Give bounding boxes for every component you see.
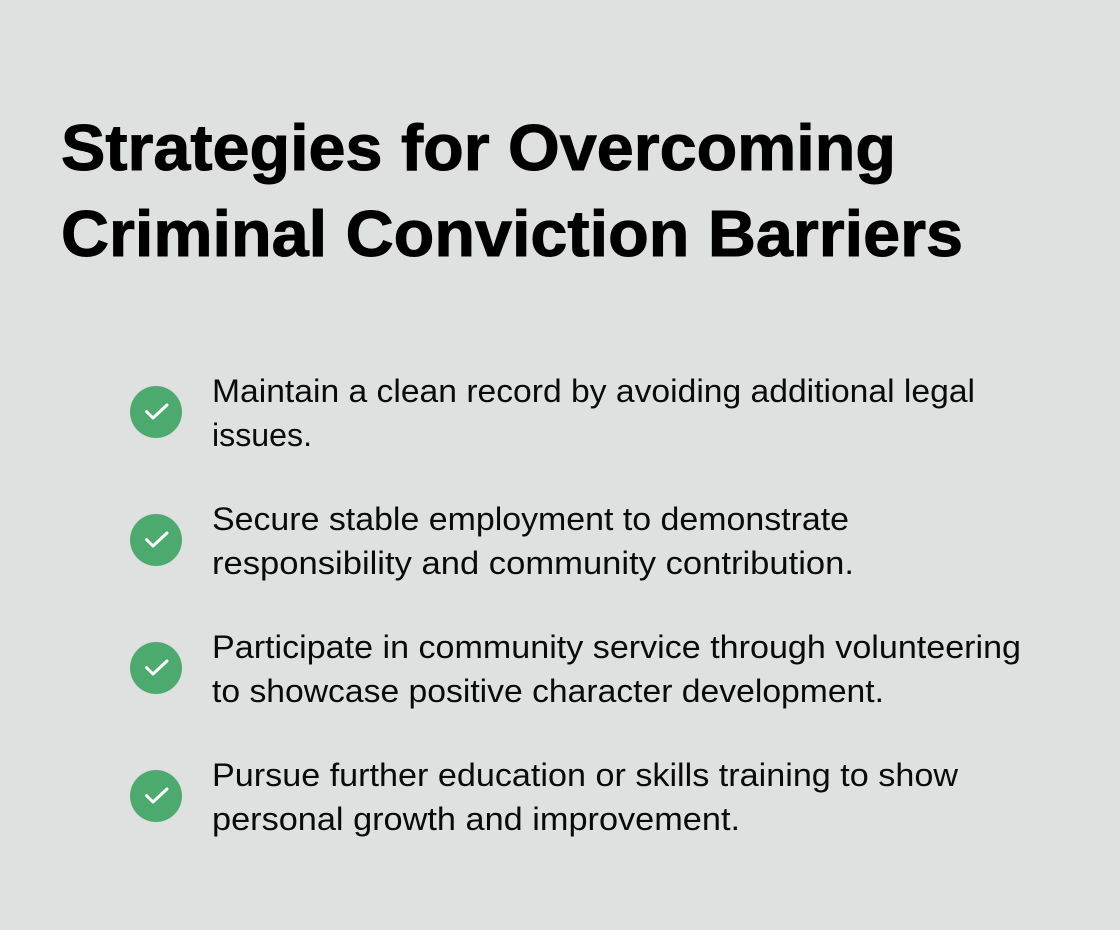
icon: check circle 3 <box>130 642 182 694</box>
text: item 4 <box>212 757 959 837</box>
text: item 1 <box>212 373 975 453</box>
text: item 2: Secure stable employment to demonstrate <box>212 501 849 537</box>
title: Strategies for Overcoming <box>61 111 896 184</box>
text: item 2: responsibility and community contribution. <box>212 545 854 581</box>
icon: check circle 4 <box>130 770 182 822</box>
text: item 1: Maintain a clean record by avoiding additional legal <box>212 373 975 409</box>
icon: check circle 2 <box>130 514 182 566</box>
icon: check circle 1 <box>130 386 182 438</box>
list item 3 <box>130 629 1021 709</box>
text: item 3: Participate in community service through volunteering <box>212 629 1021 665</box>
list item 2 <box>130 501 854 581</box>
text: item 3: to showcase positive character development. <box>212 673 884 709</box>
list item 1 <box>130 373 975 453</box>
title: Criminal Conviction Barriers <box>61 197 963 270</box>
title <box>61 111 963 270</box>
text: item 4: personal growth and improvement. <box>212 801 740 837</box>
text: item 2 <box>212 501 854 581</box>
text: item 4: Pursue further education or skills training to show <box>212 757 959 793</box>
list item 4 <box>130 757 959 837</box>
text: item 3 <box>212 629 1021 709</box>
text: item 1: issues. <box>212 417 312 453</box>
